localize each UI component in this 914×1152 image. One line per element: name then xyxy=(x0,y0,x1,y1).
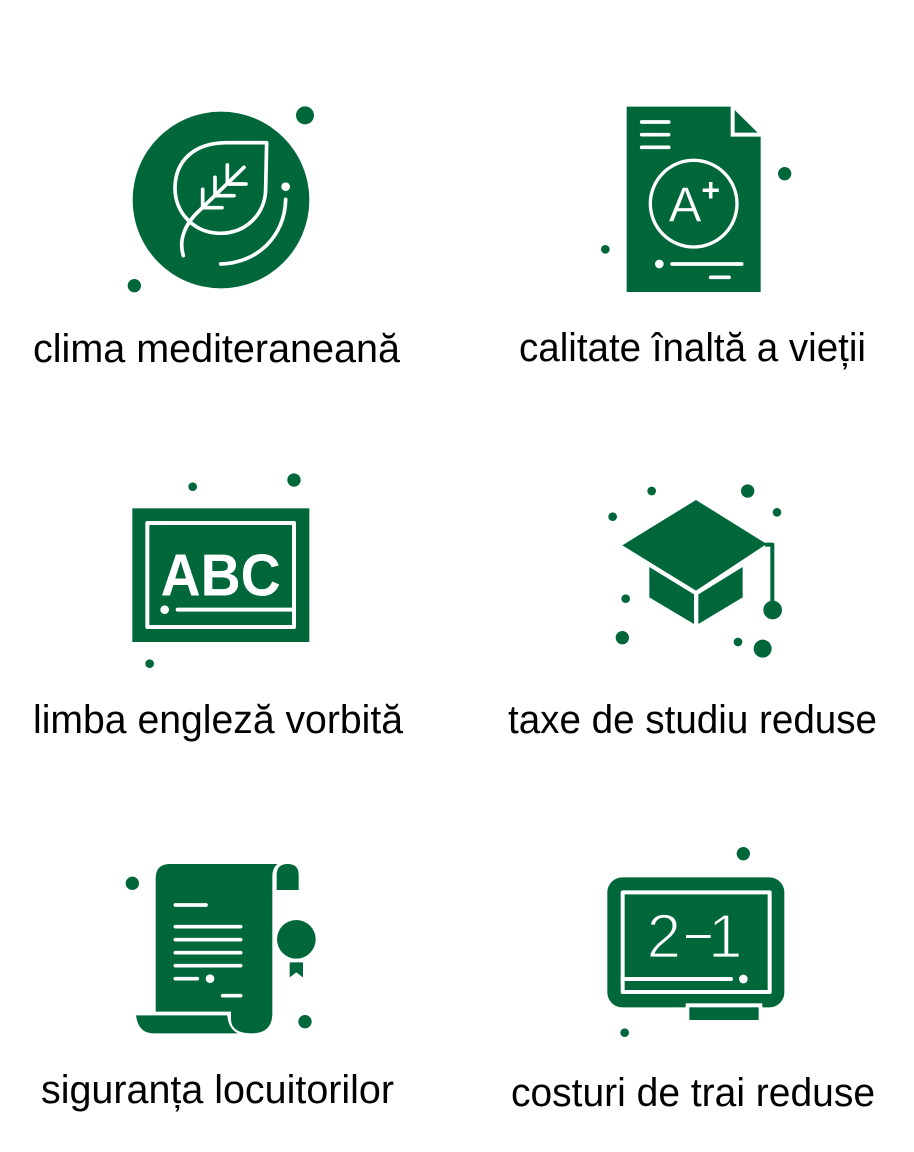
panel: limba engleza vorbita xyxy=(33,473,404,742)
icon: blackboard 2-1: 2 xyxy=(647,902,681,971)
icon: blackboard 2-1: 1 xyxy=(708,902,742,971)
icon: ABC board: ABC xyxy=(161,542,281,609)
icon: graded document: + xyxy=(701,172,720,208)
label: calitate inalta a vietii: calitate înaltă a vieții xyxy=(519,326,866,370)
label: siguranta locuitorilor: siguranța locuitorilor xyxy=(41,1068,394,1112)
label: clima mediteraneana: clima mediteraneană xyxy=(33,327,401,371)
label: costuri de trai reduse: costuri de trai reduse xyxy=(511,1071,875,1115)
icon: graded document xyxy=(601,107,791,292)
label: limba engleza vorbita: limba engleză vorbită xyxy=(33,698,404,742)
icon: blackboard 2-1: – xyxy=(686,909,711,958)
icon: scroll with seal xyxy=(126,864,316,1033)
icon: ABC board xyxy=(132,473,309,668)
panel: costuri de trai reduse xyxy=(511,847,875,1115)
panel: calitate inalta a vietii xyxy=(519,107,866,370)
panel: clima mediteraneana xyxy=(33,106,401,371)
panel: siguranta locuitorilor xyxy=(41,864,394,1112)
icon: graduation cap xyxy=(608,484,782,658)
icon: leaf in circle xyxy=(128,106,314,292)
panel: taxe de studiu reduse xyxy=(508,484,877,742)
icon: blackboard 2-1 xyxy=(607,847,784,1037)
icon: graded document: A xyxy=(669,177,702,232)
label: taxe de studiu reduse: taxe de studiu reduse xyxy=(508,698,877,742)
